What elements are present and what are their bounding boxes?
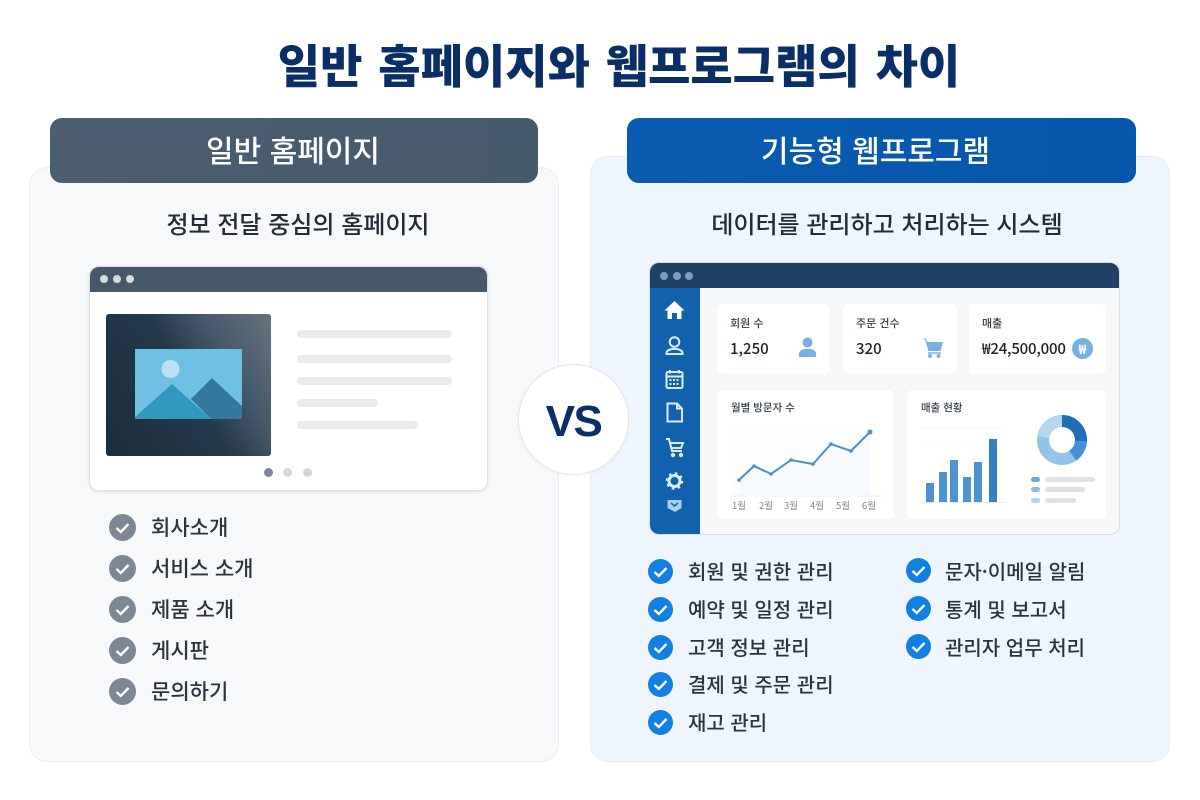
icon: won coin: ₩ (1079, 339, 1086, 358)
checklist: web program column 2 (906, 556, 1085, 661)
chart card: monthly visitors (716, 389, 895, 520)
browser mockup: homepage (89, 266, 488, 491)
stat card: members (716, 303, 831, 375)
stat card: sales (968, 303, 1107, 375)
label: 회원 수 (730, 315, 763, 331)
text placeholder lines (297, 330, 452, 429)
item: company intro (109, 512, 228, 542)
item: inventory (648, 707, 767, 736)
icon: calendar (666, 370, 682, 388)
checklist: general homepage (109, 512, 253, 706)
line chart: 1월 (732, 498, 746, 512)
chart title: 매출 현황 (921, 400, 963, 415)
line chart: 2월 (759, 498, 773, 512)
dashboard title bar (649, 262, 1120, 288)
chart title: 월별 방문자 수 (731, 400, 795, 415)
heading: general homepage (50, 118, 538, 183)
label: 주문 건수 (856, 315, 900, 331)
icon: cart (666, 439, 683, 456)
line chart: 5월 (836, 498, 850, 512)
icon: won coin (1072, 338, 1093, 359)
icon: home (664, 301, 684, 319)
donut chart (1037, 415, 1087, 465)
VS badge (518, 364, 629, 475)
item: statistics: 통계 및 보고서 (945, 594, 1067, 623)
heading: web program (627, 118, 1136, 183)
item: board: 게시판 (151, 635, 209, 665)
icon: badge (668, 500, 682, 512)
item: inquiry: 문의하기 (151, 676, 228, 706)
item: payment: 결제 및 주문 관리 (688, 669, 834, 698)
heading: general homepage: 일반 홈페이지 (206, 127, 380, 171)
icon: user (798, 338, 816, 357)
item: product intro: 제품 소개 (151, 594, 234, 624)
item: admin tasks: 관리자 업무 처리 (945, 632, 1085, 661)
stat card: orders (842, 303, 958, 375)
item: product intro (109, 594, 234, 624)
hero image with picture icon (106, 314, 271, 456)
item: service intro: 서비스 소개 (151, 553, 253, 583)
item: inquiry (109, 676, 228, 706)
sidebar with icons (649, 288, 700, 535)
bar chart (921, 428, 1005, 503)
item: reservations: 예약 및 일정 관리 (688, 594, 834, 623)
item: inventory: 재고 관리 (688, 707, 767, 736)
label: 매출 (982, 315, 1002, 331)
subtitle: web program: 데이터를 관리하고 처리하는 시스템 (711, 205, 1063, 240)
line chart (731, 430, 881, 512)
line chart: 3월 (784, 498, 798, 512)
value: 1,250 (730, 338, 769, 359)
VS text: VS (546, 397, 601, 446)
item: customer info: 고객 정보 관리 (688, 632, 810, 661)
panel: general homepage (29, 167, 559, 762)
value: 320 (856, 338, 882, 359)
item: company intro: 회사소개 (151, 512, 228, 542)
donut legend (1031, 477, 1095, 503)
panel: web program (590, 156, 1170, 762)
browser title bar (89, 266, 488, 292)
title: 일반 홈페이지와 웹프로그램의 차이 (278, 31, 960, 97)
dashboard window dots (660, 272, 693, 280)
item: member permissions: 회원 및 권한 관리 (688, 556, 834, 585)
item: board (109, 635, 209, 665)
heading: web program: 기능형 웹프로그램 (761, 127, 990, 171)
dashboard mockup (649, 262, 1120, 535)
subtitle: general homepage: 정보 전달 중심의 홈페이지 (166, 205, 430, 240)
carousel dots (264, 468, 312, 477)
icon: user (666, 337, 682, 354)
line chart: 6월 (862, 498, 876, 512)
icon: gear (667, 474, 682, 488)
checklist: web program column 1 (648, 556, 834, 736)
browser window dots (100, 275, 134, 283)
icon: document (668, 404, 682, 422)
line chart: 4월 (810, 498, 824, 512)
value: ₩24,500,000 (982, 338, 1066, 359)
icon: cart (922, 338, 943, 358)
chart card: sales status (906, 389, 1107, 520)
item: SMS and email alerts: 문자·이메일 알림 (945, 556, 1085, 585)
